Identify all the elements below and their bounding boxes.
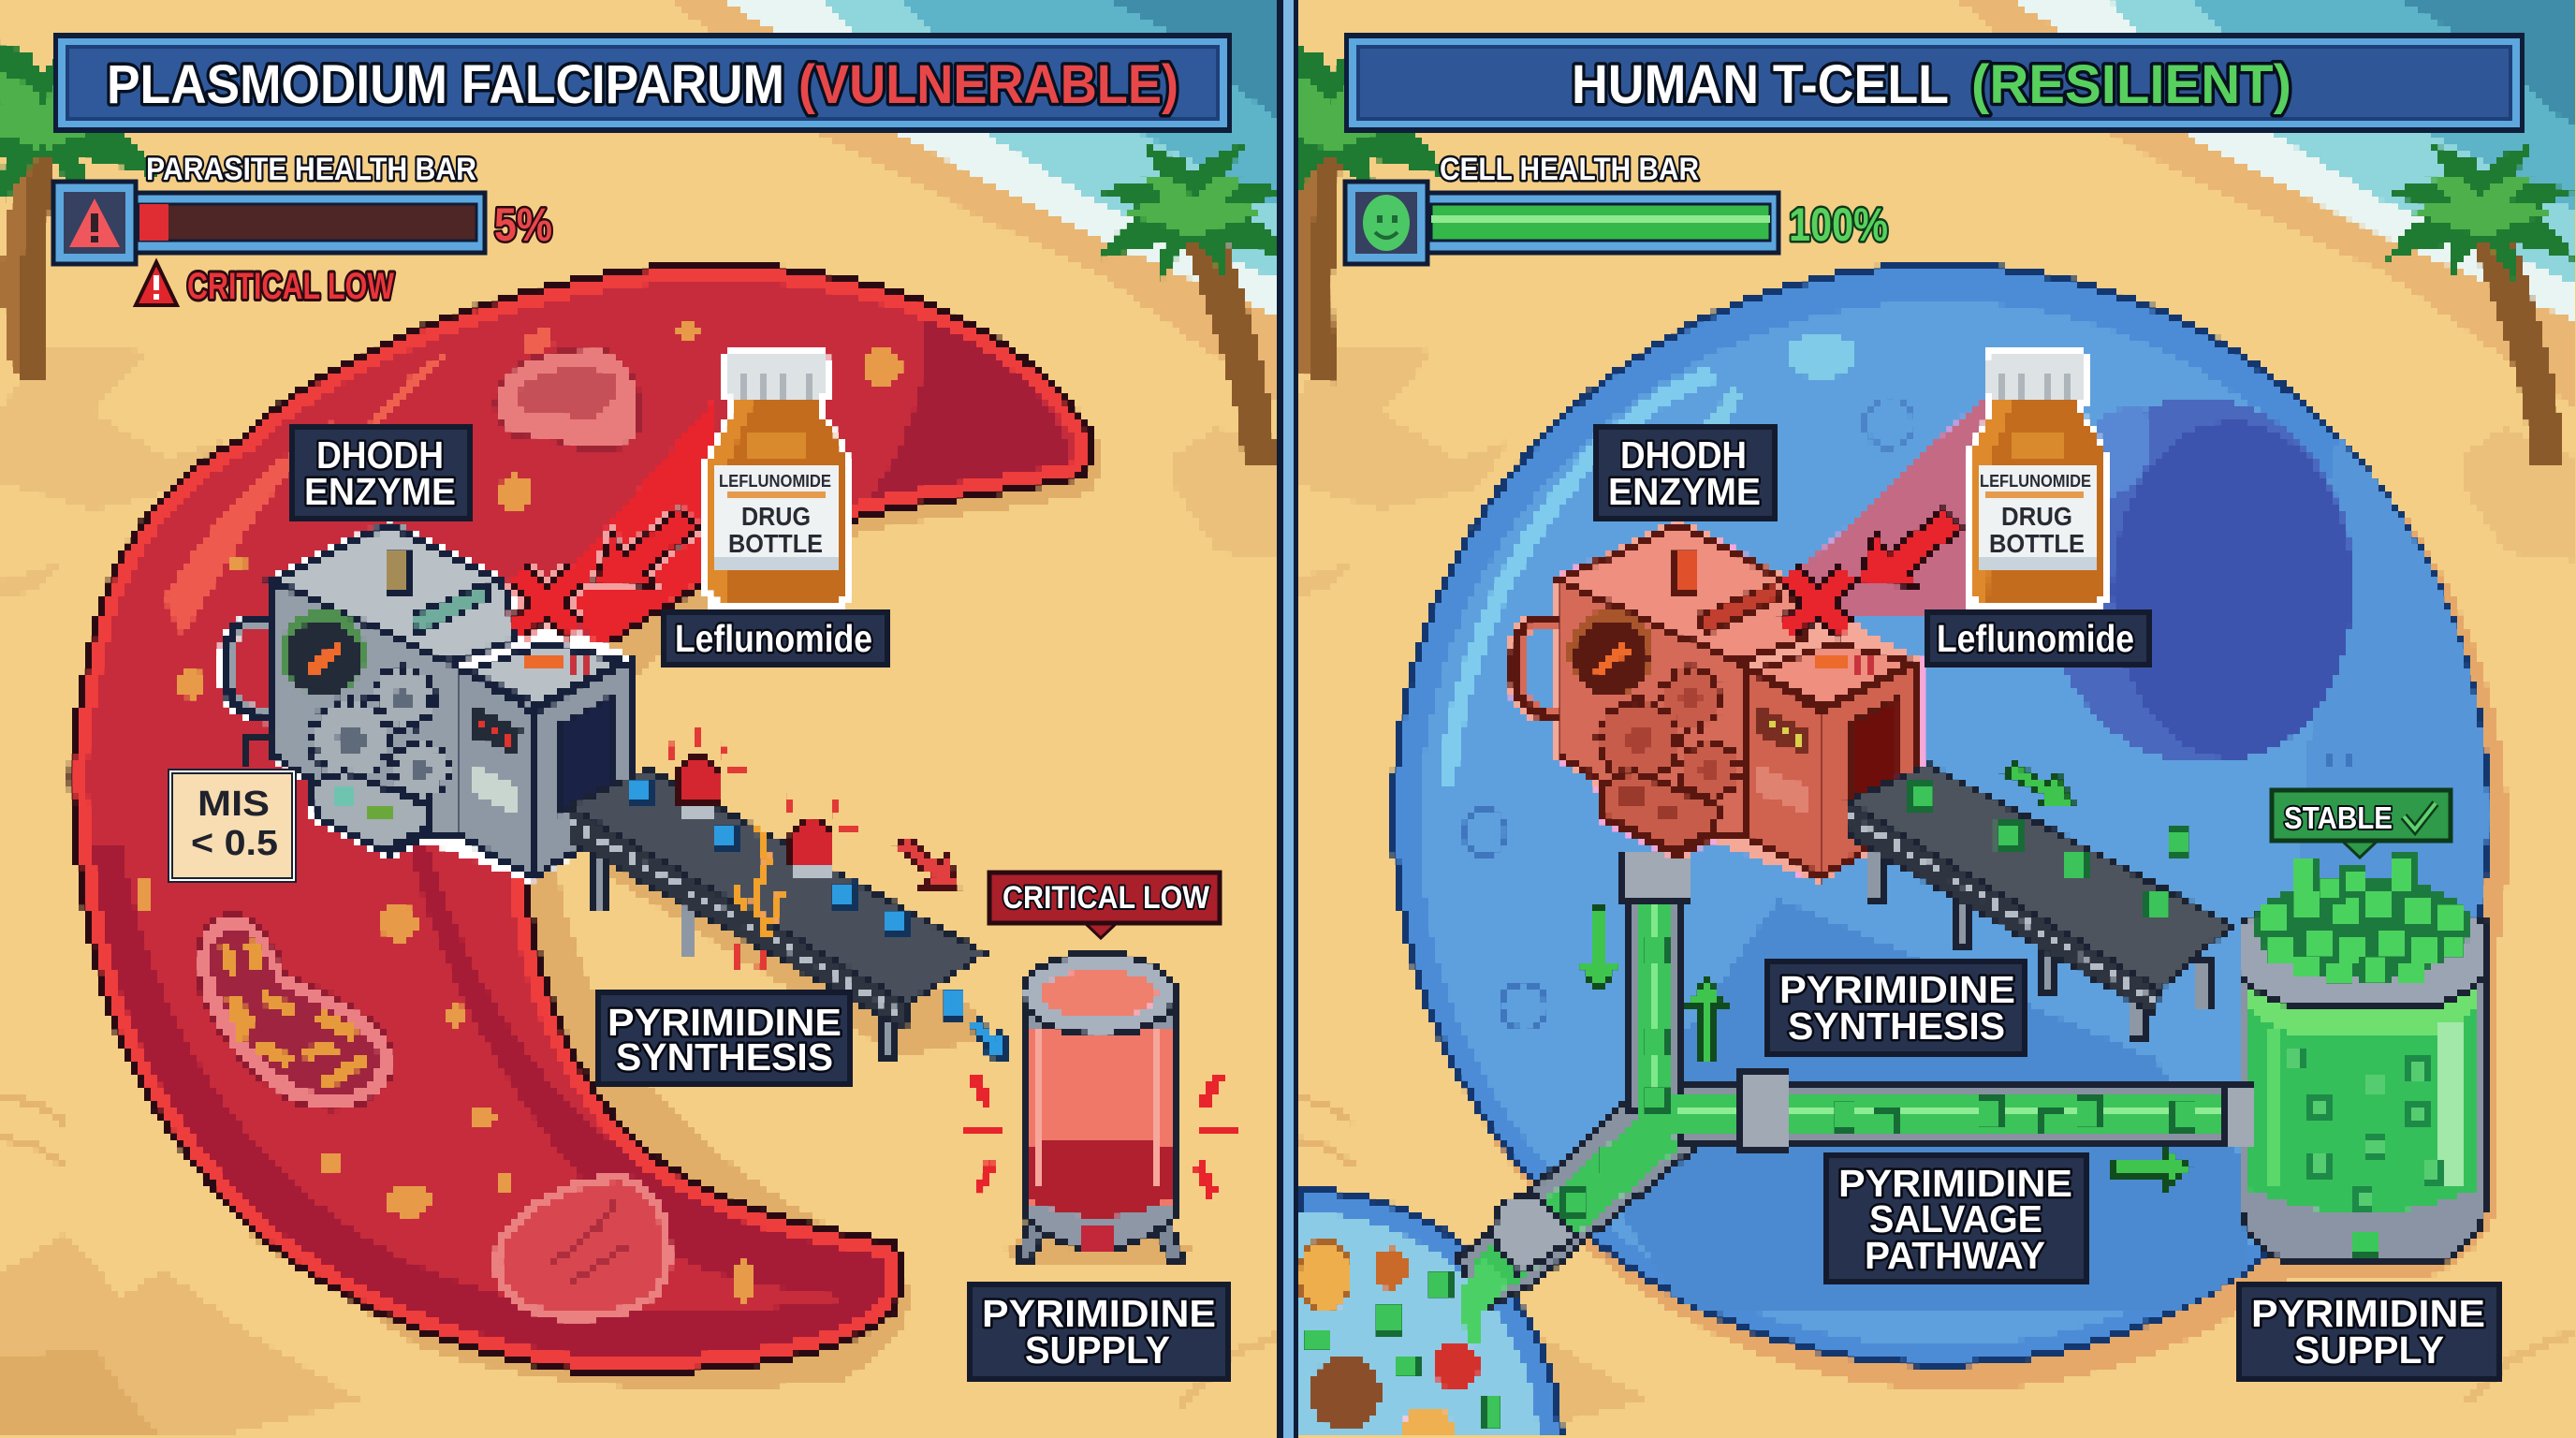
- drug bottle left: [704, 346, 850, 610]
- label: Pyrimidine synthesis right: SYNTHESIS: [1788, 1005, 2005, 1048]
- label: bottle text left: BOTTLE: [728, 529, 823, 558]
- title bar: Human T-cell: HUMAN T-CELL: [1572, 54, 1949, 115]
- label: bottle text right: BOTTLE: [1989, 529, 2085, 558]
- critical low warning: [136, 262, 394, 307]
- warning icon: [69, 198, 120, 247]
- machine: grey DHODH enzyme: [227, 524, 630, 877]
- panel: right beach scenery: [1203, 0, 2576, 1438]
- title bar: Human T-cell: (RESILIENT): [1971, 54, 2291, 115]
- MIS tag string: [245, 740, 273, 770]
- callout: stable: STABLE: [2284, 800, 2393, 835]
- title bar: Human T-cell: [1344, 33, 2525, 133]
- label: DHODH enzyme right: [1596, 427, 1775, 519]
- label: Pyrimidine supply left: SUPPLY: [1025, 1328, 1170, 1372]
- conveyor belt left: [567, 770, 986, 1059]
- red parasite cell body: [56, 264, 1102, 1404]
- arrow: drug inhibition right: [1858, 510, 1961, 585]
- small nutrient cell: [1298, 1191, 1560, 1438]
- label: Leflunomide left: Leflunomide: [675, 617, 872, 660]
- label: bottle text right: DRUG: [2001, 502, 2072, 531]
- label: bottle text left: [719, 472, 831, 558]
- drug beam left: [571, 403, 714, 646]
- label: MIS tag: [170, 771, 294, 880]
- panel: left beach scenery: [0, 0, 1297, 1438]
- health percent: 100%: [1789, 198, 1888, 251]
- tank right: [2223, 856, 2494, 1275]
- label: Pyrimidine synthesis left: SYNTHESIS: [616, 1035, 833, 1078]
- drug beam right: [1797, 394, 1986, 617]
- label: bottle text left: DRUG: [741, 502, 811, 531]
- label: Pyrimidine synthesis left: [598, 992, 850, 1084]
- label: DHODH enzyme right: DHODH: [1620, 433, 1747, 477]
- pipe end collar: [2223, 1083, 2254, 1147]
- nucleus: [2045, 398, 2354, 763]
- conveyor shadow left: [599, 814, 983, 1058]
- label: Pyrimidine salvage pathway: PYRIMIDINE: [1838, 1162, 2072, 1205]
- label: Pyrimidine salvage pathway: SALVAGE: [1869, 1197, 2042, 1240]
- smile icon: [1363, 195, 1410, 251]
- label: Pyrimidine salvage pathway: [1826, 1155, 2086, 1282]
- label: DHODH enzyme left: DHODH: [316, 433, 444, 477]
- title bar: Plasmodium falciparum: [53, 33, 1232, 133]
- blue T-cell body: [1394, 265, 2527, 1390]
- label: bottle text right: LEFLUNOMIDE: [1980, 472, 2091, 491]
- X mark left: [517, 575, 577, 629]
- arrow: drug inhibition left: [594, 510, 697, 585]
- arrow: green flow: [2003, 763, 2074, 807]
- health bar caption: PARASITE HEALTH BAR: [146, 152, 476, 187]
- label: bottle text right: [1980, 472, 2091, 558]
- green arrows: [1578, 907, 2190, 1189]
- sparks: [735, 824, 782, 969]
- parasite health bar: [53, 152, 552, 264]
- callout: stable: [2272, 790, 2451, 858]
- alarm lights left: [669, 726, 856, 880]
- label: Pyrimidine synthesis right: [1767, 961, 2025, 1054]
- conveyor belt right: [1847, 765, 2232, 1037]
- X mark right: [1788, 575, 1848, 629]
- health bar caption: CELL HEALTH BAR: [1440, 152, 1699, 187]
- label: DHODH enzyme left: ENZYME: [304, 470, 456, 513]
- label: Pyrimidine supply left: PYRIMIDINE: [982, 1292, 1216, 1335]
- label: DHODH enzyme left: [292, 427, 470, 519]
- label: Leflunomide right: Leflunomide: [1937, 617, 2134, 660]
- label: DHODH enzyme right: ENZYME: [1608, 470, 1761, 513]
- label: Pyrimidine supply right: SUPPLY: [2294, 1328, 2444, 1372]
- organelle: lower blob: [497, 1178, 667, 1317]
- arrow: red flow: [896, 838, 959, 889]
- drug bottle right: [1964, 346, 2110, 610]
- tank left: [964, 953, 1236, 1267]
- label: Pyrimidine synthesis left: PYRIMIDINE: [607, 1001, 842, 1044]
- title bar: Plasmodium falciparum: PLASMODIUM FALCIPARUM: [107, 54, 784, 115]
- label: Pyrimidine supply right: PYRIMIDINE: [2251, 1292, 2485, 1335]
- arrow: blue drop: [969, 1019, 1007, 1058]
- label: Pyrimidine supply left: [970, 1284, 1228, 1379]
- label: Pyrimidine supply right: [2239, 1284, 2499, 1379]
- label: MIS tag: < 0.5: [191, 824, 278, 863]
- callout: critical low: CRITICAL LOW: [1003, 880, 1210, 916]
- cell health bar: [1345, 152, 1888, 264]
- organelle: upper golgi: [496, 348, 640, 450]
- machine: red DHODH enzyme: [1515, 524, 1918, 877]
- organelle: mitochondrion: [198, 915, 393, 1109]
- critical low warning: CRITICAL LOW: [187, 266, 394, 307]
- label: Pyrimidine synthesis right: PYRIMIDINE: [1779, 968, 2015, 1011]
- label: bottle text left: LEFLUNOMIDE: [719, 472, 831, 491]
- callout: critical low: [989, 873, 1220, 938]
- salvage pipe: [1456, 852, 2253, 1341]
- title bar: Plasmodium falciparum: (VULNERABLE): [798, 54, 1178, 115]
- orange granules: [135, 321, 901, 1301]
- centre divider: [1277, 0, 1298, 1438]
- label: MIS tag: MIS: [198, 785, 270, 824]
- label: Pyrimidine salvage pathway: PATHWAY: [1865, 1234, 2045, 1277]
- health percent: 5%: [494, 198, 552, 251]
